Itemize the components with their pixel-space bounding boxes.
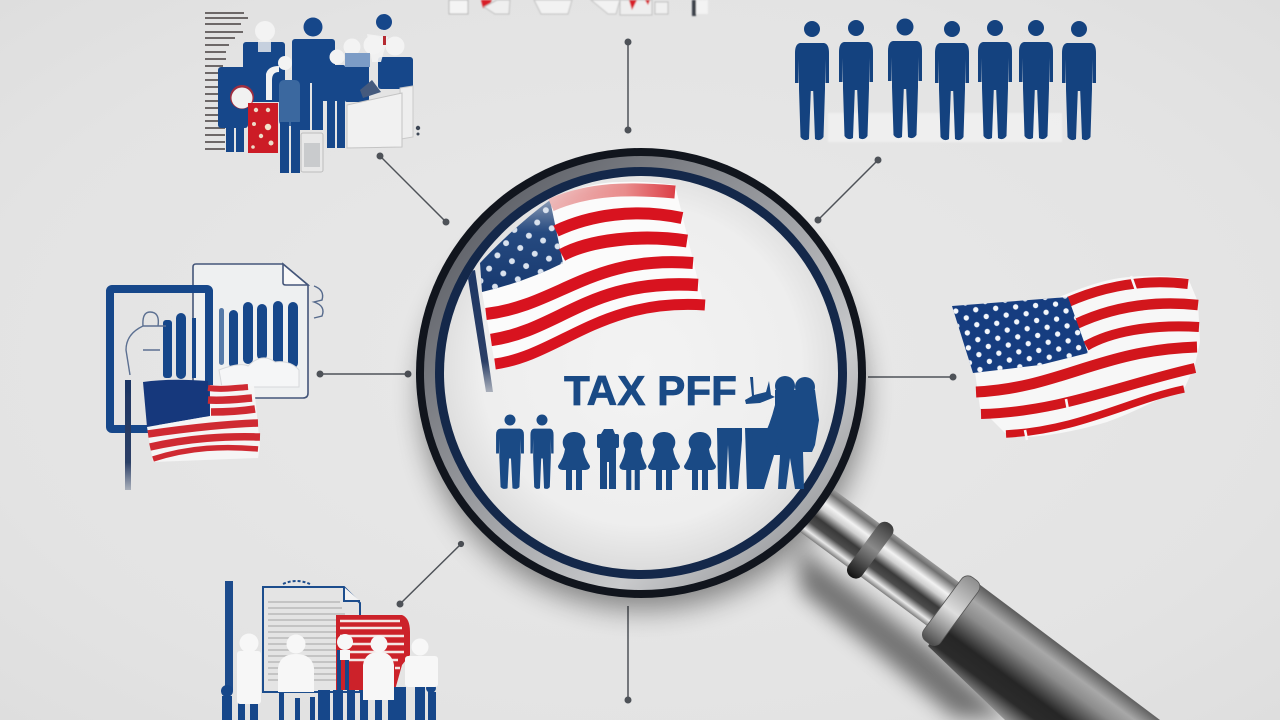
connector: top right	[815, 157, 881, 223]
man 3	[597, 429, 619, 489]
connector: top left	[377, 153, 449, 225]
folded corner	[283, 264, 308, 285]
white figure 2	[278, 634, 314, 692]
small raised hand silhouette	[745, 377, 775, 404]
man 1	[496, 414, 524, 489]
second collar	[919, 573, 983, 649]
lens rim inner	[435, 167, 847, 579]
panel: document with people (bottom left)	[221, 581, 438, 720]
flag white field	[952, 276, 1200, 437]
lens glass	[444, 176, 838, 570]
flag white field	[480, 182, 705, 370]
lens rim metal	[424, 156, 858, 590]
red patterned bag	[248, 103, 278, 153]
navy frame	[110, 289, 209, 429]
white figure 4	[363, 636, 394, 700]
person 1	[795, 21, 829, 140]
inner bars	[163, 313, 196, 379]
person 2	[839, 20, 873, 139]
flag white field	[147, 385, 260, 462]
person 6	[1019, 20, 1053, 139]
blue figures at the bottom	[221, 650, 436, 720]
man 2	[530, 414, 554, 489]
blue pole	[225, 581, 233, 691]
trousers pair 1	[717, 428, 742, 489]
glass jar	[301, 133, 323, 172]
panel: row of business people (top right)	[795, 18, 1096, 142]
flag stripes	[486, 190, 705, 364]
panel: document, chart frame and flag (left)	[110, 264, 323, 490]
person 4	[935, 21, 969, 140]
flag canton	[143, 380, 210, 427]
connector: left	[317, 371, 411, 377]
round head with red outline	[230, 85, 254, 109]
flag red stripes	[148, 387, 260, 459]
connector: top	[625, 39, 631, 133]
bars in document	[219, 301, 298, 368]
document sheets	[347, 80, 420, 148]
binder clip	[314, 286, 323, 318]
cropped white figures at top edge	[449, 0, 708, 16]
person 5	[978, 20, 1012, 139]
lens contents	[468, 178, 706, 392]
decorative ruler lines	[205, 13, 248, 149]
panel: crowd with documents (top left)	[205, 13, 420, 173]
connector: bottom	[625, 606, 631, 703]
white figure 3	[337, 634, 353, 660]
person 3	[888, 18, 922, 138]
white figure 1	[237, 634, 261, 704]
red striped sheet	[336, 615, 410, 690]
first collar	[844, 519, 897, 582]
lined document	[263, 581, 360, 692]
connector: right	[868, 374, 956, 380]
document outline	[193, 264, 308, 398]
left group of figures	[218, 14, 413, 152]
handle neck	[794, 484, 970, 633]
flag pole	[467, 270, 493, 392]
trousers pair 2	[745, 428, 775, 489]
front figure	[266, 66, 300, 173]
flag red stripes	[976, 282, 1199, 434]
magnifying glass	[416, 148, 1160, 720]
lens and handle cast shadow	[421, 186, 1008, 718]
highlight strip under feet	[828, 113, 1062, 142]
white figure 5	[405, 638, 438, 687]
panel: waving American flag (right)	[952, 276, 1200, 440]
child 2	[619, 432, 647, 490]
child 3	[648, 432, 680, 490]
lens rim outer	[416, 148, 866, 598]
flag canton	[480, 200, 563, 292]
jug outline	[126, 312, 166, 375]
connector: bottom left	[397, 541, 464, 607]
flag pole	[125, 380, 131, 490]
handle grip	[928, 581, 1160, 720]
flag canton with stars	[952, 297, 1088, 373]
tall adult figure with child	[752, 376, 819, 489]
snow mound	[219, 358, 299, 387]
lens family figures	[496, 376, 819, 490]
child 1	[558, 432, 590, 490]
shirts and heads	[255, 21, 404, 70]
person 7	[1062, 21, 1096, 140]
child 4	[684, 432, 716, 490]
white cuts in stripes	[1025, 276, 1136, 440]
lens heading text: TAX PFF	[564, 367, 737, 414]
glass reflection on flag top	[546, 178, 616, 204]
